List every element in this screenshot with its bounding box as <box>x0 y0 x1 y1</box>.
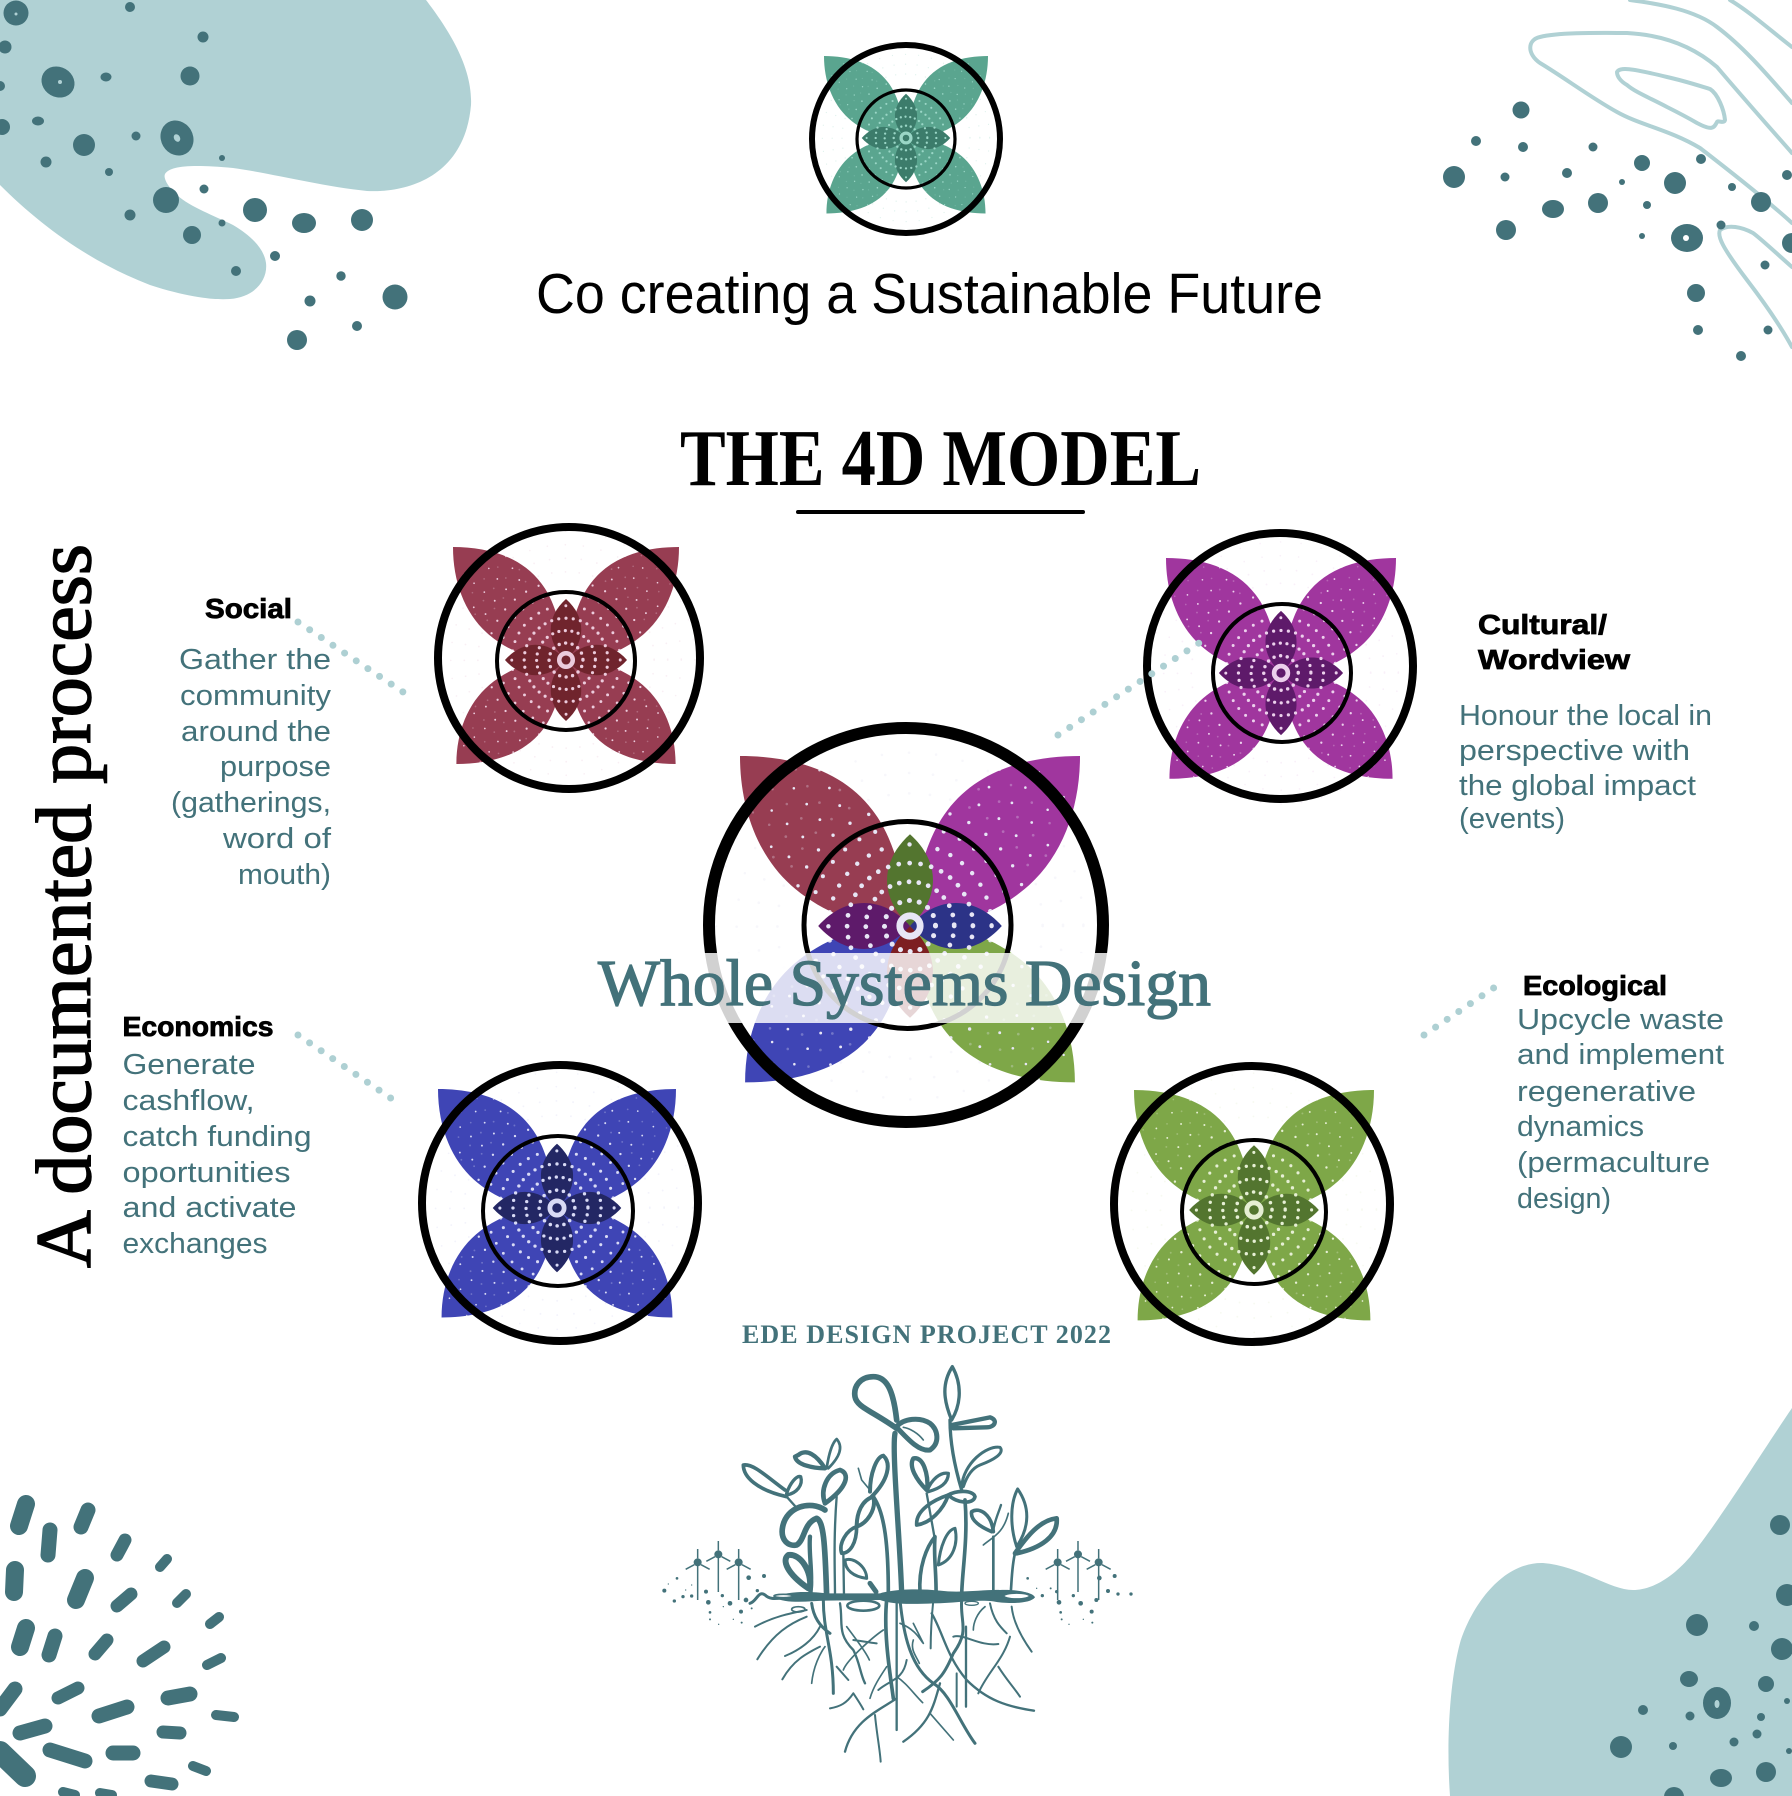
text: economics: oportunities <box>122 1157 290 1189</box>
text: cultural: Cultural/ <box>1478 609 1607 640</box>
dotted connector: social <box>298 622 406 694</box>
text: cultural <box>1459 609 1712 835</box>
text: social: community <box>180 680 332 712</box>
central flower: whole systems <box>709 725 1111 1127</box>
text: social: mouth) <box>238 859 331 891</box>
heading: The 4D Model: THE 4D MODEL <box>680 415 1201 503</box>
text: ecological: Upcycle waste <box>1517 1004 1724 1036</box>
text: ecological <box>1517 970 1724 1215</box>
text: ecological: Ecological <box>1523 970 1667 1001</box>
decorative strokes: bottom left <box>0 1504 234 1795</box>
icon: seedlings <box>743 1367 1057 1597</box>
text: social: around the <box>181 716 331 748</box>
text: cultural: (events) <box>1459 803 1565 835</box>
text: cultural: the global impact <box>1459 770 1696 802</box>
text: cultural: Honour the local in <box>1459 700 1712 732</box>
text: ecological: and implement <box>1517 1039 1724 1071</box>
dotted connector: ecological <box>1424 987 1495 1035</box>
title: Co creating a Sustainable Future <box>536 262 1323 326</box>
flower: ecological <box>1112 1066 1396 1352</box>
center title band <box>703 953 1110 1023</box>
illustration: seedlings, roots and wind turbines <box>662 1367 1133 1762</box>
background blob: bottom right <box>1448 1408 1792 1796</box>
icon: soil line <box>750 1589 1035 1604</box>
text: social <box>171 593 332 891</box>
text: economics: cashflow, <box>122 1085 254 1117</box>
flower: social <box>433 527 700 793</box>
text: economics: exchanges <box>122 1228 268 1260</box>
vertical heading: A documented process <box>20 544 107 1268</box>
text: economics: and activate <box>122 1192 296 1224</box>
text: ecological: design) <box>1517 1183 1611 1215</box>
text: ecological: (permaculture <box>1517 1147 1710 1179</box>
background blob: top left <box>0 0 471 350</box>
text: economics: Generate <box>122 1049 256 1081</box>
text: social: purpose <box>220 751 331 783</box>
text: economics: Economics <box>122 1011 274 1042</box>
decorative lines and dots: top right <box>1443 0 1792 361</box>
text: social: word of <box>222 823 332 855</box>
center title: Whole Systems Design <box>598 947 1211 1020</box>
text: ecological: dynamics <box>1517 1111 1644 1143</box>
text: social: (gatherings, <box>171 787 331 819</box>
caption: project: EDE DESIGN PROJECT 2022 <box>742 1320 1111 1349</box>
icon: roots <box>755 1600 1034 1762</box>
text: ecological: regenerative <box>1517 1076 1696 1108</box>
text: cultural: perspective with <box>1459 735 1690 767</box>
icon: scattered dots <box>662 1574 1133 1625</box>
flower: economics <box>417 1065 698 1348</box>
text: social: Social <box>205 593 292 624</box>
text: cultural: Wordview <box>1478 644 1630 675</box>
dotted connector: economics <box>298 1035 395 1101</box>
text: social: Gather the <box>179 644 331 676</box>
icon: soil pockets <box>774 1593 1030 1612</box>
logo flower <box>809 41 1003 235</box>
text: economics <box>122 1011 312 1260</box>
icon: wind turbines left <box>686 1541 751 1600</box>
flower: cultural <box>1145 533 1417 809</box>
dotted connector: cultural <box>1058 643 1199 735</box>
text: economics: catch funding <box>122 1121 312 1153</box>
icon: wind turbines right <box>1046 1541 1111 1600</box>
heading underline <box>796 510 1085 514</box>
